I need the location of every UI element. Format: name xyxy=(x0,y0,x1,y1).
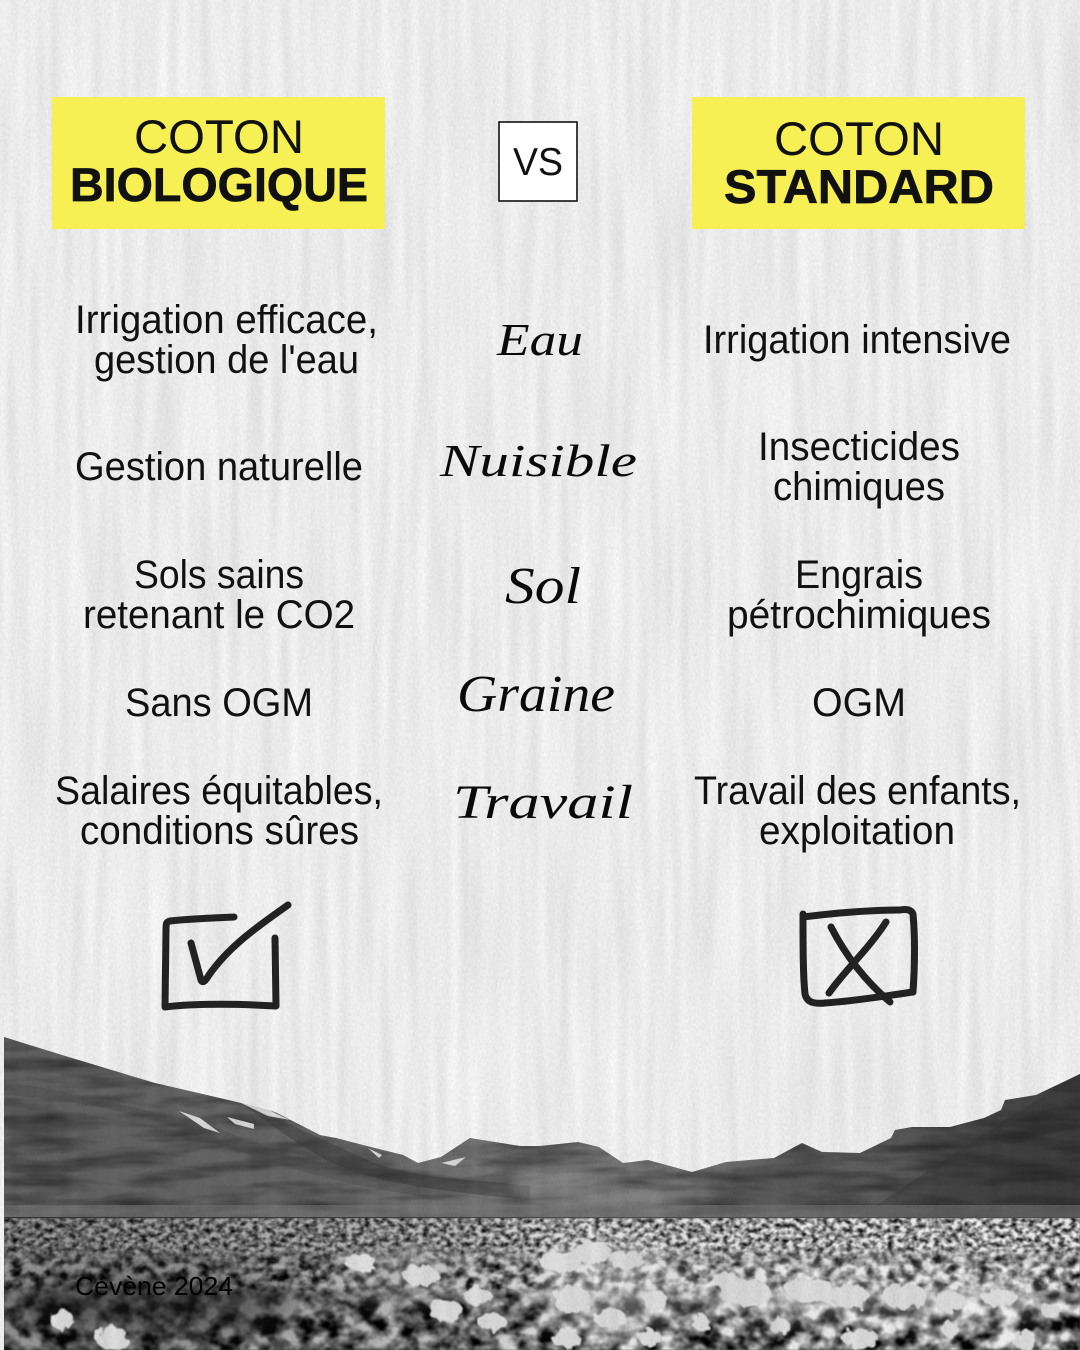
row sol: biologique xyxy=(83,553,355,637)
row eau: biologique: Irrigation efficace, xyxy=(75,298,378,342)
light mass of cotton xyxy=(340,1237,1060,1333)
VS badge xyxy=(499,122,577,201)
row eau: biologique: gestion de l'eau xyxy=(94,338,359,382)
dark stems on the left xyxy=(0,1273,300,1337)
row travail: standard: Travail des enfants, xyxy=(694,769,1021,813)
panel: coton standard header: COTON xyxy=(774,112,944,165)
row sol: biologique: Sols sains xyxy=(134,553,304,597)
row travail: standard xyxy=(694,769,1021,853)
row nuisible: standard: Insecticides xyxy=(758,425,960,469)
row nuisible: biologique: Gestion naturelle xyxy=(75,445,363,489)
row travail: script label: Travail xyxy=(453,776,633,829)
panel: coton biologique header: COTON xyxy=(134,110,304,163)
row sol: standard xyxy=(727,553,991,637)
row sol: script label: Sol xyxy=(505,558,581,615)
row nuisible: standard xyxy=(758,425,960,509)
VS badge: VS xyxy=(513,141,563,184)
icon: hand-drawn cross box xyxy=(803,909,914,1003)
panel: coton biologique header xyxy=(52,97,385,229)
row travail: standard: exploitation xyxy=(759,809,955,853)
source credit: Cévène 2024 xyxy=(75,1271,233,1301)
row sol: biologique: retenant le CO2 xyxy=(83,593,355,637)
row travail: biologique xyxy=(55,769,383,853)
icon: snow patches xyxy=(179,1103,466,1166)
panel: coton standard header xyxy=(692,97,1025,229)
row graine: standard: OGM xyxy=(812,681,906,725)
row nuisible: script label: Nuisible xyxy=(439,435,637,486)
icon: hand-drawn check box xyxy=(165,905,288,1007)
row graine: biologique: Sans OGM xyxy=(125,681,313,725)
panel: coton biologique header: BIOLOGIQUE xyxy=(70,158,368,211)
cotton tufts xyxy=(50,1241,1060,1350)
panel: coton standard header: STANDARD xyxy=(724,160,994,213)
row nuisible: standard: chimiques xyxy=(773,465,945,509)
row travail: biologique: Salaires équitables, xyxy=(55,769,383,813)
row sol: standard: pétrochimiques xyxy=(727,593,991,637)
paper ribs over landscape xyxy=(4,1030,1080,1350)
row travail: biologique: conditions sûres xyxy=(80,809,359,853)
row sol: standard: Engrais xyxy=(795,553,923,597)
row eau: standard: Irrigation intensive xyxy=(703,318,1011,362)
row graine: script label: Graine xyxy=(457,666,615,723)
mountains xyxy=(0,1030,1080,1225)
cotton field xyxy=(0,1215,1080,1350)
row eau: biologique xyxy=(75,298,378,382)
landscape: mountains and cotton field xyxy=(0,1030,1080,1350)
row eau: script label: Eau xyxy=(496,314,583,365)
